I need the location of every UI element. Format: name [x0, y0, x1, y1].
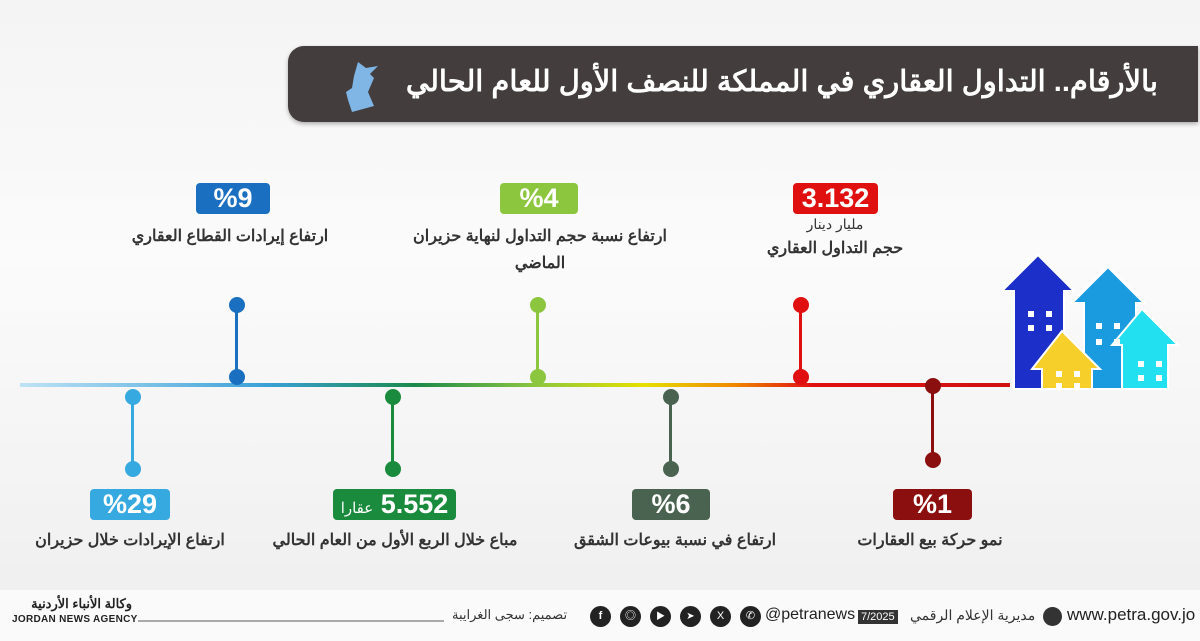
label: 3.132: مليار دينار: [807, 216, 863, 232]
badge: 1%: [893, 489, 972, 520]
social icons: ✆: [746, 610, 755, 622]
timeline line: [20, 383, 1010, 387]
marker: 6%: [663, 389, 679, 477]
badge: 6%: %6: [651, 489, 691, 519]
footer: 7/2025: [861, 611, 895, 623]
social icons: ➤: [686, 611, 695, 622]
footer: JORDAN NEWS AGENCY: [12, 614, 138, 625]
social icons: X: [717, 610, 724, 622]
marker: 4%: [530, 297, 546, 383]
footer: www.petra.gov.jo: [1067, 605, 1195, 624]
social icons: ▶: [656, 611, 665, 621]
icon: jordan map: [346, 62, 378, 112]
badge: 29%: %29: [103, 489, 157, 519]
badge: 9%: %9: [213, 183, 253, 213]
marker: 1%: [925, 378, 941, 468]
designer credit: تصميم: سجى الغرايبة: [452, 607, 567, 622]
marker: 29%: [125, 389, 141, 477]
badge: 3.132: 3.132: [802, 183, 869, 213]
label: 3.132: [767, 216, 903, 258]
marker: 9%: [229, 297, 245, 385]
social icons: [590, 606, 761, 627]
icon: houses: [1004, 256, 1176, 390]
footer: مديرية الإعلام الرقمي: [910, 607, 1035, 623]
title text: بالأرقام.. التداول العقاري في المملكة للنصف الأول للعام الحالي: [406, 66, 1158, 98]
label: 1%: نمو حركة بيع العقارات: [857, 532, 1003, 549]
social icons: ◎: [625, 610, 636, 622]
badge: 4%: [500, 183, 578, 214]
label: 5.552: مباع خلال الربع الأول من العام الحالي: [273, 532, 517, 549]
badge: 4%: %4: [519, 183, 559, 213]
handle and date: @petranews: [765, 606, 855, 623]
label: 6%: ارتفاع في نسبة بيوعات الشقق: [574, 532, 776, 549]
label: 3.132: حجم التداول العقاري: [767, 240, 903, 257]
agency logo text: وكالة الأنباء الأردنية: [31, 596, 132, 611]
badge: 1%: %1: [913, 489, 952, 519]
footer: [0, 590, 1200, 641]
badge: 9%: [196, 183, 270, 214]
marker: 5.552: [385, 389, 401, 477]
label: 9%: ارتفاع إيرادات القطاع العقاري: [132, 228, 328, 245]
label: 29%: ارتفاع الإيرادات خلال حزيران: [35, 532, 225, 549]
marker: 3.132: [793, 297, 809, 385]
title bar: [288, 46, 1198, 122]
badge: 6%: [632, 489, 710, 520]
badge: 29%: [90, 489, 170, 520]
badge: 5.552: 5.552 عقارا: [341, 489, 448, 519]
social icons: f: [599, 610, 602, 622]
label: 4%: [413, 228, 667, 272]
label: 4%: الماضي: [515, 255, 565, 272]
label: 4%: ارتفاع نسبة حجم التداول لنهاية حزيران: [413, 228, 667, 245]
